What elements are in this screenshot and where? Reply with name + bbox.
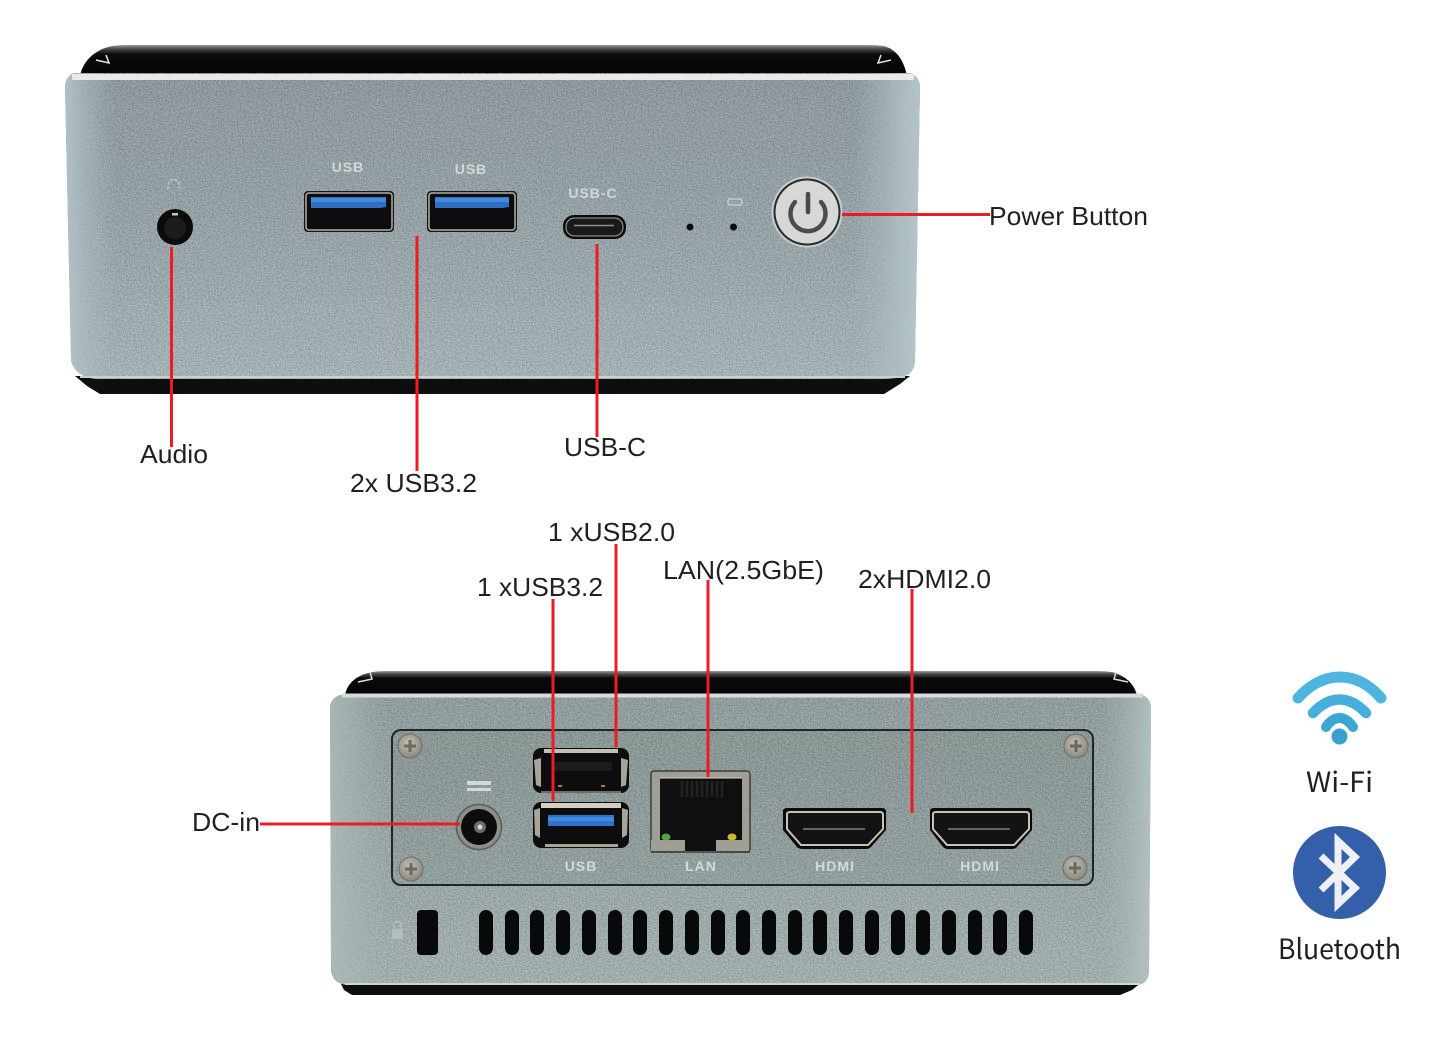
callout: DC-in: DC-in	[192, 807, 260, 837]
kensington lock icon	[392, 922, 403, 939]
screws	[398, 734, 1088, 881]
rear top black lid	[345, 671, 1137, 695]
audio jack	[157, 180, 193, 245]
DC-in jack	[456, 781, 502, 850]
callout: Power Button: Power Button	[989, 201, 1148, 231]
label: Bluetooth: Bluetooth	[1278, 928, 1401, 968]
icon: Wi-Fi	[1298, 677, 1381, 744]
status LEDs	[686, 199, 742, 230]
label: Wi-Fi: Wi-Fi	[1306, 761, 1373, 801]
USB-C port: USB-C	[568, 185, 618, 201]
ventilation slots	[417, 910, 1033, 955]
USB 3.2 port	[533, 802, 629, 874]
USB-C port	[563, 185, 626, 239]
USB 2.0 port	[533, 748, 629, 793]
callout: 1 xUSB2.0: 1 xUSB2.0	[548, 517, 675, 547]
callout: 1 xUSB3.2: 1 xUSB3.2	[477, 572, 603, 602]
I/O panel	[392, 730, 1093, 885]
LAN port	[651, 771, 750, 874]
callout: 2xHDMI2.0: 2xHDMI2.0	[858, 564, 991, 594]
callout: Audio: Audio	[140, 439, 208, 469]
rear body	[330, 695, 1151, 985]
USB 3.2 port left: USB	[332, 159, 364, 175]
front body	[65, 73, 920, 379]
power button	[772, 176, 842, 248]
front bottom black base	[75, 376, 910, 394]
rear bottom black base	[340, 982, 1142, 995]
callout: 2x USB3.2: 2x USB3.2	[350, 468, 477, 498]
device: rear view	[330, 671, 1151, 995]
front top black lid	[80, 45, 907, 76]
USB 3.2 port left	[304, 159, 394, 232]
USB 3.2 port right	[427, 161, 517, 232]
callout: USB-C: USB-C	[564, 432, 646, 462]
callout: LAN(2.5GbE): LAN(2.5GbE)	[663, 555, 824, 585]
USB 3.2 port right: USB	[455, 161, 487, 177]
HDMI port right: HDMI	[960, 858, 1000, 874]
HDMI port left	[783, 808, 886, 874]
LAN port: LAN	[685, 858, 717, 874]
icon: Bluetooth	[1293, 826, 1386, 919]
USB 3.2 port: USB	[565, 858, 597, 874]
HDMI port left: HDMI	[815, 858, 855, 874]
device: front view	[65, 45, 920, 394]
HDMI port right	[930, 808, 1032, 874]
